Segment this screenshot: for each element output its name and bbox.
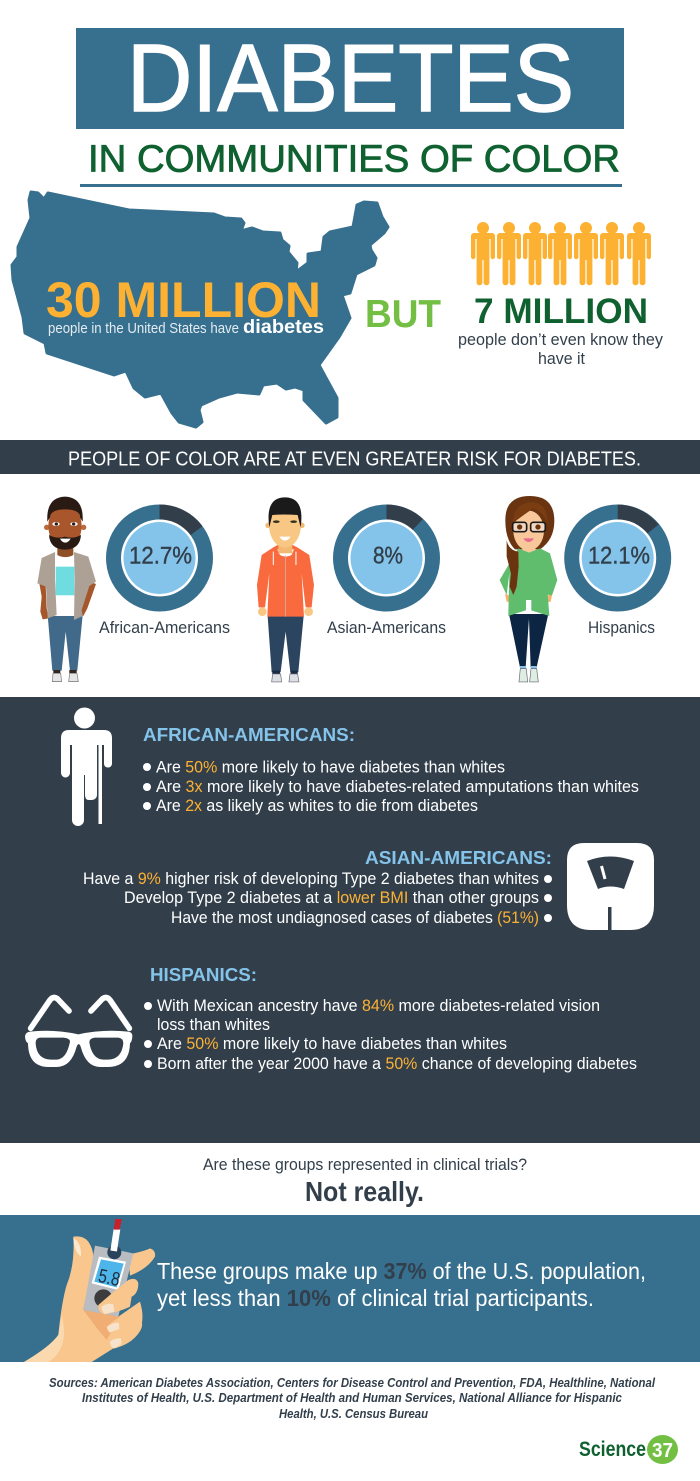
logo: Science 37: Science <box>579 1438 646 1461</box>
stat caption: people in the United States have <box>48 320 239 337</box>
block: African-Americans facts <box>61 708 639 826</box>
heading banner: PEOPLE OF COLOR ARE AT EVEN GREATER RISK FOR DIABETES. <box>68 448 641 470</box>
statement text: yet less than 10% of clinical trial participants. <box>157 1285 594 1311</box>
label: Hispanics: Hispanics <box>588 618 655 637</box>
bullet list: Have a 9% higher risk of developing Type 2 diabetes than whites <box>83 870 539 888</box>
panel: African-Americans rate <box>37 497 230 682</box>
donut chart: 12.7% <box>106 504 213 612</box>
bullet list: With Mexican ancestry have 84% more diabetes-related vision <box>157 997 600 1015</box>
label: Asian-Americans: Asian-Americans <box>327 618 446 637</box>
bullet list: Are 2x as likely as whites to die from diabetes <box>156 797 478 815</box>
icon: hand holding glucose meter <box>24 1219 155 1362</box>
heading banner <box>0 440 700 474</box>
logo: Science 37 <box>579 1435 678 1464</box>
panel: clinical trial representation <box>0 1215 700 1362</box>
bullet list <box>144 997 637 1073</box>
panel: dark detail section <box>0 697 700 1143</box>
bullet list <box>143 758 639 815</box>
bullet list: Have the most undiagnosed cases of diabetes (51%) <box>171 909 539 927</box>
illustration: African-American man <box>37 497 96 682</box>
donut chart: 12.1% <box>564 504 671 612</box>
donut chart: 8%: 8% <box>373 542 403 570</box>
icon: weighing scale <box>567 843 654 930</box>
stat caption: have it <box>538 349 585 368</box>
donut chart: 12.7%: 12.7% <box>129 542 192 570</box>
stat caption <box>48 317 324 338</box>
answer text: Not really. <box>305 1176 424 1207</box>
sources: Institutes of Health, U.S. Department of Health and Human Services, National Alliance for Hispanic <box>82 1391 622 1405</box>
illustration: Hispanic woman <box>500 496 557 682</box>
subtitle: In communities of color: IN COMMUNITIES OF COLOR <box>88 138 620 180</box>
label: African-Americans: African-Americans <box>99 618 230 637</box>
block: Asian-Americans facts <box>83 843 654 930</box>
title: Diabetes: DIABETES <box>127 25 574 132</box>
stat caption <box>458 330 663 368</box>
sources: Sources: American Diabetes Association, Centers for Disease Control and Prevention, FDA, Healthline, National <box>49 1376 655 1390</box>
bullet list: Are 3x more likely to have diabetes-related amputations than whites <box>156 778 639 796</box>
statement text: These groups make up 37% of the U.S. population, <box>157 1258 646 1284</box>
panel: US map with 30 million statistic <box>12 192 388 427</box>
heading: African-Americans: AFRICAN-AMERICANS: <box>143 724 355 745</box>
stat caption: people don’t even know they <box>458 330 663 349</box>
panel: Hispanics rate <box>500 496 671 682</box>
icon: hand holding glucose meter: 5.8 <box>96 1264 122 1290</box>
bullet list: Develop Type 2 diabetes at a lower BMI than other groups <box>124 889 539 907</box>
bullet list: loss than whites <box>157 1016 270 1034</box>
icon: seven people <box>471 222 651 285</box>
text: But: BUT <box>365 293 441 336</box>
icon: eyeglasses <box>25 997 132 1067</box>
heading: Hispanics: HISPANICS: <box>150 964 257 985</box>
stat: 30 million: 30 MILLION <box>46 272 321 328</box>
sources <box>49 1376 655 1421</box>
bullet list: Born after the year 2000 have a 50% chance of developing diabetes <box>157 1055 637 1073</box>
donut chart: 12.1%: 12.1% <box>588 542 650 570</box>
block: Hispanics facts <box>25 964 637 1073</box>
heading: Asian-Americans: ASIAN-AMERICANS: <box>365 847 552 868</box>
logo: Science 37: 37 <box>652 1440 673 1462</box>
panel: 7 million undiagnosed <box>458 222 663 368</box>
icon: amputee with crutch <box>61 708 112 826</box>
icon: map of the United States <box>12 192 388 427</box>
stat caption: diabetes <box>243 317 324 338</box>
bullet list: Are 50% more likely to have diabetes than whites <box>156 758 505 776</box>
stat: 7 million: 7 MILLION <box>474 292 648 331</box>
donut chart: 8% <box>333 504 440 612</box>
question text: Are these groups represented in clinical trials? <box>203 1155 527 1174</box>
statement text <box>157 1258 646 1311</box>
panel: Asian-Americans rate <box>257 497 446 682</box>
sources: Health, U.S. Census Bureau <box>279 1407 428 1421</box>
bullet list <box>83 870 552 927</box>
illustration: Asian-American man <box>257 497 314 682</box>
bullet list: Are 50% more likely to have diabetes than whites <box>157 1035 507 1053</box>
